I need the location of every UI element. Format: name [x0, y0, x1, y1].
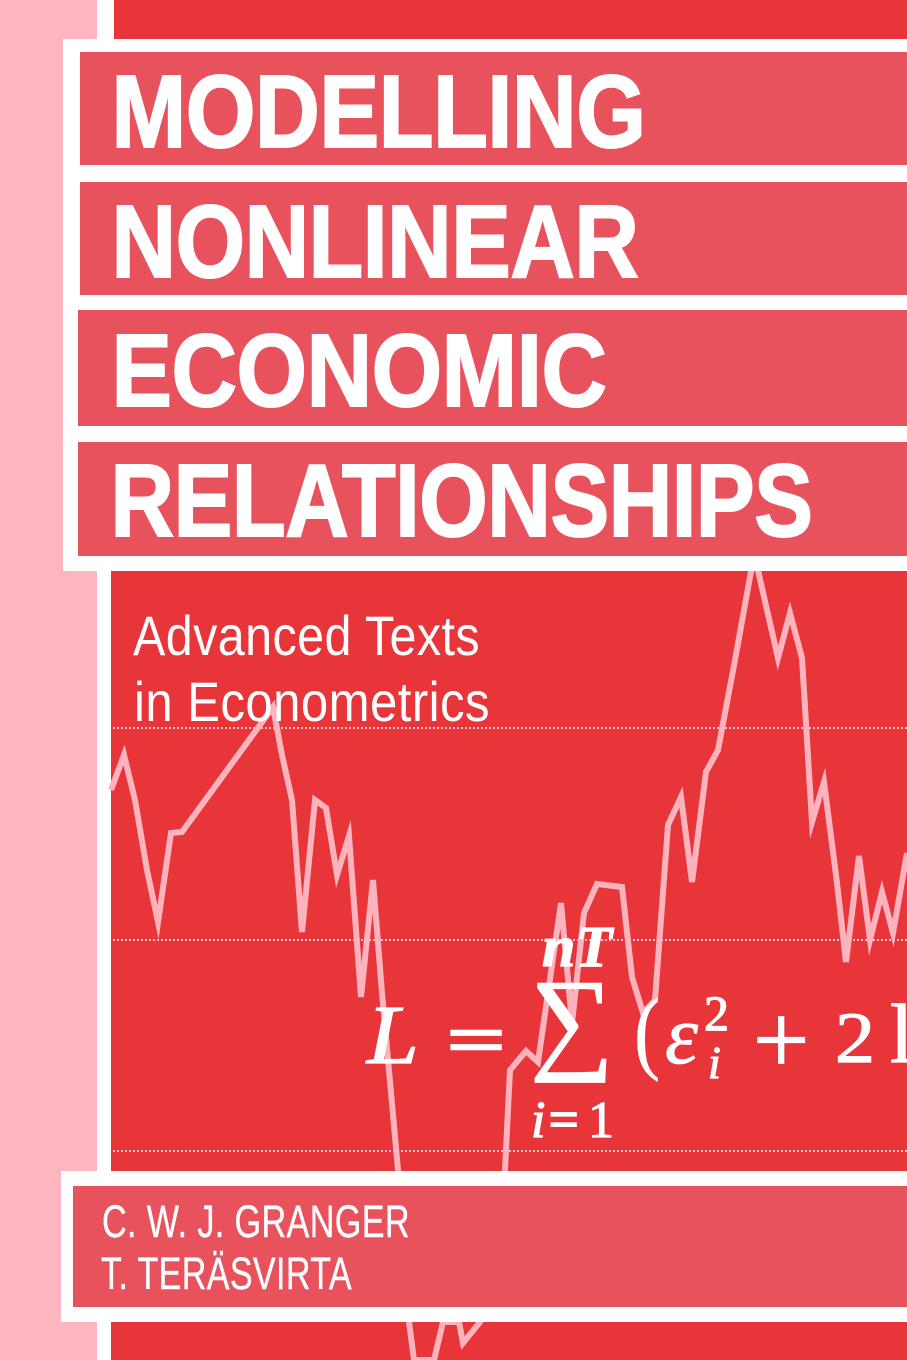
formula: +	[753, 984, 809, 1095]
title band: Nonlinear: NONLINEAR	[112, 184, 638, 299]
dotted gridlines	[113, 728, 907, 1151]
series title: in Econometrics	[134, 670, 490, 733]
formula	[366, 914, 907, 1149]
formula: 1	[588, 1092, 614, 1149]
formula: (	[634, 980, 660, 1082]
formula: =	[549, 1092, 578, 1149]
author names	[101, 1196, 410, 1299]
formula: L	[366, 989, 419, 1082]
series title	[133, 604, 490, 733]
line chart: economic time series	[111, 566, 907, 1360]
pale pink spine strip	[0, 0, 97, 1360]
formula: 2	[704, 985, 729, 1041]
formula: ∑	[530, 956, 614, 1083]
title panel	[63, 39, 907, 571]
formula: nT	[542, 914, 615, 979]
series title: Advanced Texts	[133, 604, 480, 667]
formula: 2	[835, 998, 875, 1078]
white strip	[97, 0, 111, 1360]
formula: i	[708, 1037, 721, 1088]
title band: Economic	[78, 310, 907, 428]
formula: i	[531, 1092, 545, 1149]
author panel	[61, 1171, 907, 1322]
title band: Economic: ECONOMIC	[112, 313, 606, 428]
formula: =	[447, 1000, 505, 1080]
formula: ε	[665, 989, 699, 1082]
author names: T. TERÄSVIRTA	[101, 1248, 352, 1299]
title frame	[63, 39, 907, 571]
title band: Modelling: MODELLING	[112, 54, 646, 169]
author names: C. W. J. GRANGER	[102, 1196, 410, 1247]
